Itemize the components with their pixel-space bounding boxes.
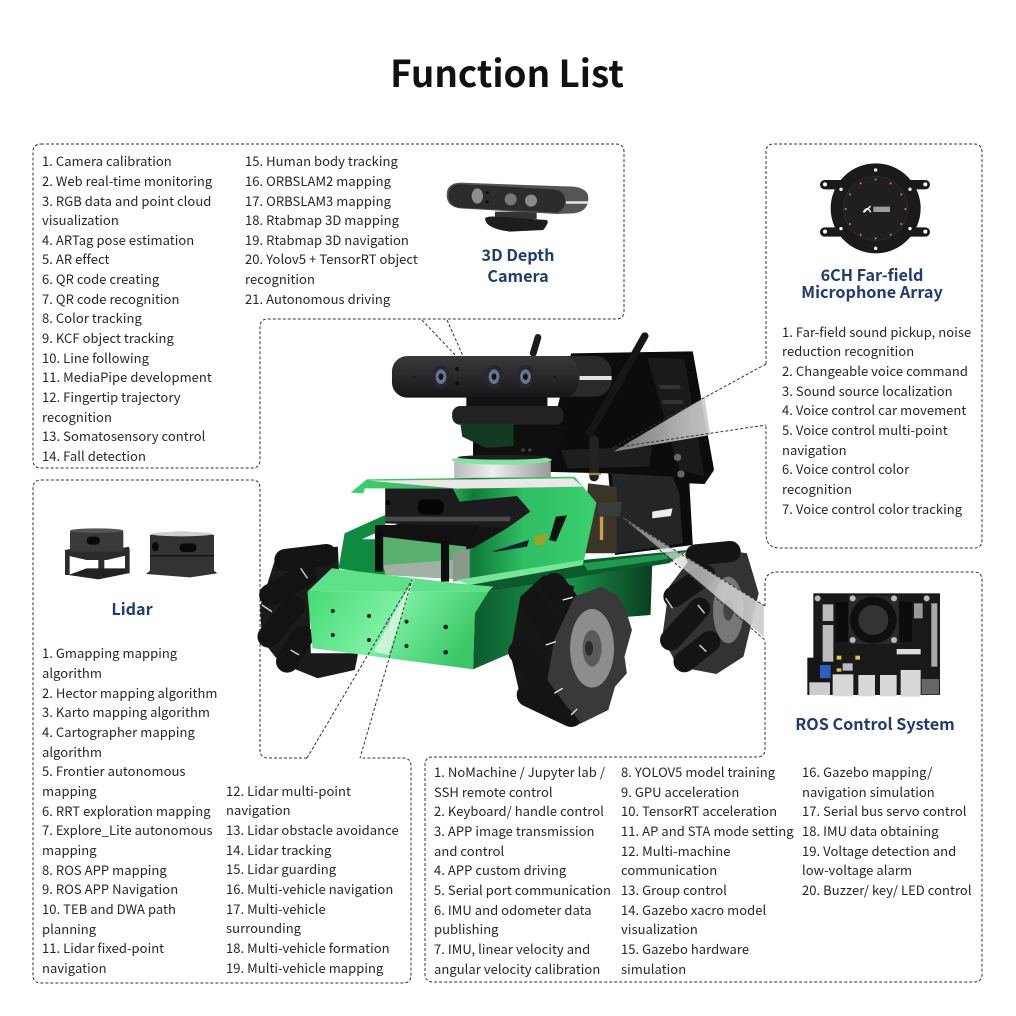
text: lidar list column 1: algorithm	[42, 742, 102, 761]
text: lidar list column 2: 12. Lidar multi-point	[226, 781, 351, 800]
text: ROS list column 1: and control	[434, 841, 504, 860]
text: lidar list column 1: navigation	[42, 958, 107, 977]
text: camera list column 2: 18. Rtabmap 3D mapping	[245, 210, 399, 229]
text: microphone list: 7. Voice control color tracking	[782, 499, 962, 518]
text: camera list column 1: 5. AR effect	[42, 249, 110, 268]
text: ROS list column 2: 8. YOLOV5 model training	[621, 762, 775, 781]
text: camera list column 2: 17. ORBSLAM3 mapping	[245, 190, 391, 210]
text: ROS list column 1: angular velocity calibration	[434, 959, 600, 978]
text: ROS list column 1: 7. IMU, linear velocity and	[434, 939, 590, 958]
text: camera list column 2: 20. Yolov5 + TensorRT object	[245, 249, 418, 268]
panel outline: 3D depth camera	[33, 144, 624, 468]
camera mount	[452, 397, 568, 460]
text: camera list column 2	[245, 151, 418, 308]
text: camera list column 1: 2. Web real-time monitoring	[42, 171, 212, 190]
panel: dashed outlines	[33, 144, 982, 983]
text: lidar list column 2: navigation	[226, 800, 291, 819]
text: ROS list column 2: simulation	[621, 959, 686, 978]
text: camera list column 1: 3. RGB data and point cloud	[42, 190, 211, 210]
text: ROS list column 2: 11. AP and STA mode setting	[621, 821, 794, 840]
text: lidar list column 1: 9. ROS APP Navigation	[42, 879, 178, 898]
robot car	[260, 336, 764, 724]
text: camera list column 1	[42, 151, 212, 465]
lidar on robot	[375, 488, 531, 582]
text: lidar list column 1: 5. Frontier autonomous	[42, 761, 186, 780]
icon: microphone array	[820, 163, 930, 253]
text: ROS list column 2: 9. GPU acceleration	[621, 782, 739, 801]
text: microphone list: 2. Changeable voice command	[782, 361, 968, 380]
text: camera list column 1: 1. Camera calibration	[42, 151, 172, 170]
text: lidar list column 2: 17. Multi-vehicle	[226, 899, 326, 918]
text: camera list column 2: 19. Rtabmap 3D navigation	[245, 230, 409, 249]
green upper bracket	[351, 477, 596, 585]
text: ROS list column 3: 16. Gazebo mapping/	[802, 762, 932, 781]
text: camera list column 1: visualization	[42, 210, 119, 229]
left wheel	[260, 547, 358, 678]
text: camera list column 2: 15. Human body tracking	[245, 151, 398, 170]
depth camera on robot	[392, 356, 612, 398]
panel outline: ROS control system	[425, 572, 982, 982]
text: ROS list column 1: 6. IMU and odometer data	[434, 900, 592, 919]
text: camera list column 1: recognition	[42, 407, 112, 426]
text: ROS list column 3: 18. IMU data obtaining	[802, 821, 939, 840]
text: camera list column 1: 10. Line following	[42, 348, 149, 367]
text: lidar list column 1: 4. Cartographer mapping	[42, 722, 195, 741]
highlight cones	[373, 397, 764, 655]
heading: microphone array: 6CH Far-field	[821, 262, 923, 286]
text: ROS list column 2	[621, 762, 794, 978]
text: lidar list column 2: surrounding	[226, 918, 301, 937]
heading: 3D depth camera: Camera	[487, 263, 549, 287]
text: camera list column 1: 8. Color tracking	[42, 308, 142, 327]
heading: 3D depth camera	[482, 242, 554, 287]
text: ROS list column 2: 15. Gazebo hardware	[621, 939, 749, 958]
text: lidar list column 1: 10. TEB and DWA path	[42, 899, 176, 918]
text: microphone list	[782, 322, 971, 518]
text: lidar list column 1: planning	[42, 919, 96, 938]
text: lidar list column 2: 18. Multi-vehicle formation	[226, 938, 390, 957]
panel outline: microphone array	[766, 144, 982, 548]
text: ROS list column 3: navigation simulation	[802, 782, 935, 801]
text: ROS list column 2: 13. Group control	[621, 880, 727, 899]
text: camera list column 2: 21. Autonomous driving	[245, 289, 390, 308]
text: camera list column 1: 7. QR code recognition	[42, 289, 179, 308]
title: Function List	[390, 44, 624, 98]
text: camera list column 1: 11. MediaPipe development	[42, 367, 212, 386]
text: ROS list column 2: 14. Gazebo xacro model	[621, 900, 766, 919]
text: lidar list column 1: 7. Explore_Lite autonomous	[42, 820, 213, 839]
heading: microphone array: Microphone Array	[801, 279, 943, 303]
text: camera list column 1: 14. Fall detection	[42, 446, 146, 465]
text: microphone list: 1. Far-field sound pickup, noise	[782, 322, 971, 341]
text: ROS list column 1: SSH remote control	[434, 782, 553, 801]
antennas	[533, 336, 645, 477]
text: lidar list column 1: mapping	[42, 781, 97, 800]
text: ROS list column 1	[434, 762, 611, 978]
text: lidar list column 1: 1. Gmapping mapping	[42, 643, 177, 662]
heading: ROS control system: ROS Control System	[795, 711, 955, 735]
text: lidar list column 1: algorithm	[42, 663, 102, 682]
text: ROS list column 1: 3. APP image transmission	[434, 821, 595, 840]
text: ROS list column 1: publishing	[434, 919, 499, 938]
leader lines	[307, 320, 766, 758]
rear screen	[473, 351, 714, 555]
text: camera list column 1: 9. KCF object tracking	[42, 328, 174, 347]
text: ROS list column 2: visualization	[621, 919, 698, 938]
text: camera list column 1: 4. ARTag pose estimation	[42, 230, 194, 249]
heading: microphone array	[801, 262, 943, 303]
text: camera list column 2: recognition	[245, 269, 315, 288]
text: lidar list column 2: 14. Lidar tracking	[226, 840, 331, 859]
text: microphone list: navigation	[782, 440, 847, 459]
text: lidar list column 1: mapping	[42, 840, 97, 859]
text: camera list column 2: 16. ORBSLAM2 mapping	[245, 171, 391, 190]
text: lidar list column 1: 3. Karto mapping algorithm	[42, 702, 210, 721]
panel outline: lidar	[33, 480, 411, 983]
front wheel	[510, 575, 632, 724]
text: microphone list: 5. Voice control multi-point	[782, 420, 948, 439]
text: lidar list column 2	[226, 781, 399, 976]
text: lidar list column 2: 13. Lidar obstacle avoidance	[226, 820, 399, 839]
text: ROS list column 2: 12. Multi-machine	[621, 841, 731, 860]
green chassis	[307, 515, 688, 669]
text: microphone list: 3. Sound source localization	[782, 381, 953, 400]
text: lidar list column 1	[42, 643, 218, 977]
icon: ROS control board	[807, 593, 940, 697]
text: ROS list column 2: 10. TensorRT acceleration	[621, 801, 777, 820]
icon: 3D depth camera	[447, 183, 588, 232]
text: ROS list column 1: 5. Serial port communication	[434, 880, 611, 899]
text: lidar list column 1: 2. Hector mapping algorithm	[42, 683, 218, 702]
text: lidar list column 1: 11. Lidar fixed-point	[42, 938, 164, 957]
text: ROS list column 2: communication	[621, 860, 717, 879]
text: ROS list column 3	[802, 762, 972, 899]
microphone array on robot	[452, 455, 552, 486]
text: ROS list column 3: 20. Buzzer/ key/ LED control	[802, 880, 972, 899]
text: ROS list column 1: 4. APP custom driving	[434, 860, 566, 879]
text: ROS list column 3: 19. Voltage detection and	[802, 841, 956, 860]
text: microphone list: reduction recognition	[782, 341, 914, 360]
text: camera list column 1: 12. Fingertip trajectory	[42, 387, 181, 406]
text: camera list column 1: 6. QR code creating	[42, 269, 159, 288]
heading: 3D depth camera: 3D Depth	[482, 242, 554, 266]
text: lidar list column 1: 8. ROS APP mapping	[42, 860, 167, 879]
text: lidar list column 2: 19. Multi-vehicle mapping	[226, 958, 383, 976]
text: microphone list: recognition	[782, 479, 852, 498]
right wheel	[662, 547, 759, 674]
text: lidar list column 1: 6. RRT exploration mapping	[42, 801, 211, 820]
text: ROS list column 1: 1. NoMachine / Jupyter lab /	[434, 762, 605, 781]
text: lidar list column 2: 15. Lidar guarding	[226, 859, 336, 878]
text: microphone list: 4. Voice control car movement	[782, 400, 966, 419]
icon: lidar modules	[65, 528, 217, 579]
text: ROS list column 3: low-voltage alarm	[802, 860, 912, 879]
heading: lidar: Lidar	[111, 596, 153, 620]
text: ROS list column 3: 17. Serial bus servo control	[802, 801, 966, 820]
text: lidar list column 2: 16. Multi-vehicle navigation	[226, 879, 393, 898]
text: microphone list: 6. Voice control color	[782, 459, 909, 478]
text: camera list column 1: 13. Somatosensory control	[42, 426, 205, 445]
text: ROS list column 1: 2. Keyboard/ handle control	[434, 801, 604, 820]
